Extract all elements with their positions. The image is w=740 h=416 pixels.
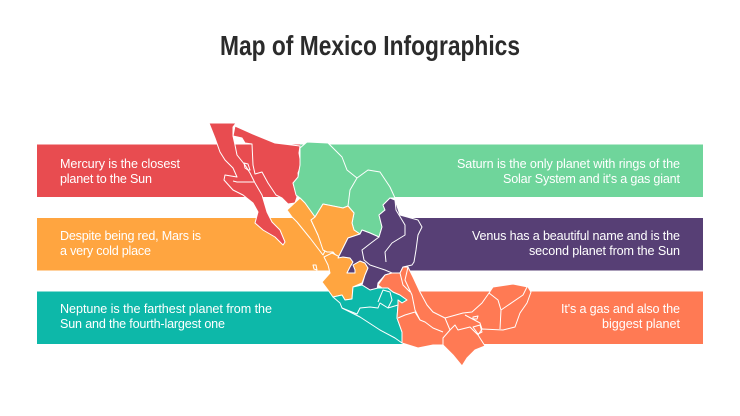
text: Jupiter: biggest planet: [602, 317, 680, 331]
band: red: [37, 144, 302, 197]
map of Mexico: [209, 123, 531, 366]
band: teal: [37, 292, 403, 344]
text: Neptune: Neptune is the farthest planet from the: [60, 302, 272, 316]
text: Mars: [60, 229, 201, 258]
text: Saturn: [457, 157, 680, 186]
region: coral south-east: [378, 267, 531, 366]
text: Venus: [472, 229, 680, 258]
text: Saturn: Saturn is the only planet with rings of the: [457, 157, 680, 171]
region: green north: [293, 142, 395, 237]
region: purple centre-east: [338, 198, 422, 290]
title: Map of Mexico Infographics: [220, 30, 520, 61]
text: Saturn: Solar System and it's a gas giant: [503, 172, 680, 186]
band: coral: [418, 292, 703, 344]
text: Neptune: Sun and the fourth-largest one: [60, 317, 225, 331]
text: Mercury: Mercury is the closest: [60, 157, 180, 171]
text: Mercury: [60, 157, 180, 186]
region: teal south-west: [333, 285, 407, 343]
text: Mercury: planet to the Sun: [60, 172, 152, 186]
text: Mars: a very cold place: [60, 244, 151, 258]
band: green: [300, 144, 703, 197]
text: Venus: Venus has a beautiful name and is the: [472, 229, 680, 243]
band: orange: [37, 218, 332, 270]
region: orange centre-west: [287, 198, 368, 300]
text: Venus: second planet from the Sun: [529, 244, 680, 258]
region: red north-west: [209, 123, 301, 245]
band: purple: [400, 218, 703, 270]
text: Neptune: [60, 302, 272, 331]
text: Mars: Despite being red, Mars is: [60, 229, 201, 243]
text: Jupiter: [561, 302, 680, 331]
text: Jupiter: It's a gas and also the: [561, 302, 680, 316]
